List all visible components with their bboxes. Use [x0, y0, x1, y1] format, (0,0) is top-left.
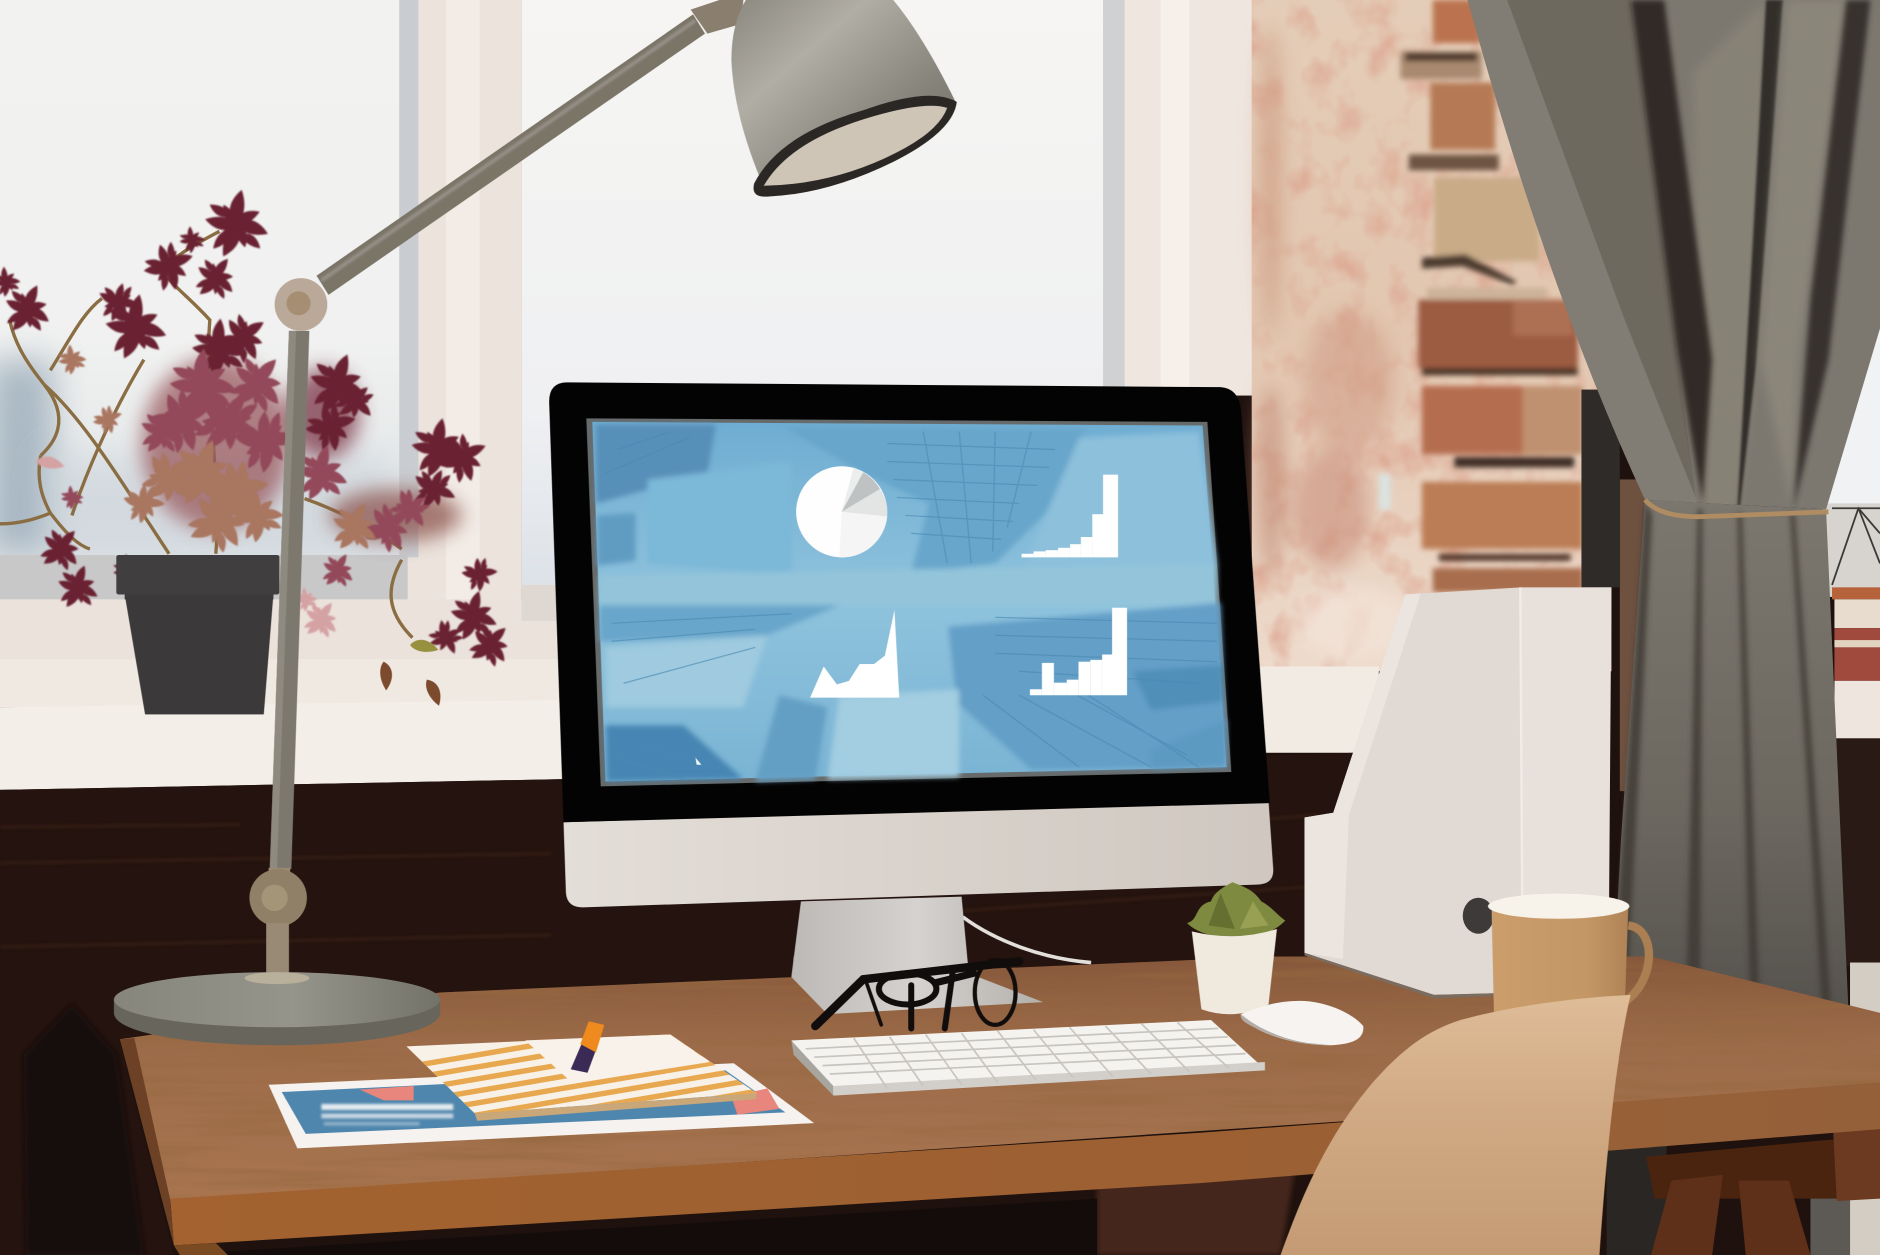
foliage: soft mass behind the leaves [141, 357, 462, 542]
foliage: dark burgundy upper leaves [0, 181, 522, 676]
drainpipe behind the curtain [1581, 390, 1620, 587]
bar chart: bottom right [1030, 608, 1127, 695]
screen wallpaper: buildings [596, 424, 1227, 782]
window frame [0, 0, 1259, 707]
monitor [549, 382, 1273, 1014]
lamp joint upper [691, 0, 743, 34]
mouse [1241, 1001, 1363, 1045]
pie chart [796, 466, 887, 557]
foliage: pink centre leaves [61, 342, 438, 596]
far right window bit with basket and books [1822, 312, 1880, 1255]
area chart [810, 610, 899, 698]
foliage: withered leaves [379, 638, 446, 708]
flowerpot [116, 555, 279, 714]
chair [1281, 995, 1631, 1255]
monitor stand [791, 897, 1043, 1014]
cable [963, 917, 1091, 963]
magazine holders [1304, 587, 1611, 998]
lamp base [114, 1000, 440, 1045]
small succulent in white pot [1187, 882, 1285, 1014]
monitor bezel [549, 382, 1270, 822]
radiator [24, 1004, 144, 1255]
curtain below desk [1607, 1139, 1667, 1255]
curtain tie [1645, 500, 1828, 517]
curtain lower drape [1611, 500, 1849, 1019]
lamp [114, 0, 957, 1045]
lamp joint lower [269, 868, 290, 880]
bar chart: top right [1022, 475, 1118, 557]
desk [120, 957, 1880, 1255]
keyboard [791, 1020, 1265, 1096]
window sill [0, 666, 1379, 790]
dark wall under sill [0, 753, 1379, 1255]
curtain upper drape [1468, 0, 1880, 515]
lamp joint middle [275, 278, 327, 331]
lamp arm [317, 14, 705, 295]
plant stems [0, 231, 412, 638]
brochure under notebook [269, 1063, 814, 1148]
foliage: pale pink leaves [35, 454, 348, 647]
lamp pole [270, 331, 309, 869]
foliage: tan lower leaves [58, 344, 389, 566]
striped notebook [406, 1006, 767, 1187]
mug [1488, 894, 1649, 1013]
highlighter pen [571, 1021, 604, 1073]
glasses [815, 960, 1019, 1028]
plant: flowerpot with foliage [0, 181, 522, 714]
brick wall [1252, 0, 1646, 791]
screen [586, 418, 1231, 786]
monitor chin [564, 801, 1273, 907]
lamp shade [731, 0, 957, 197]
curtain [1468, 0, 1880, 1255]
trestle legs [1646, 1128, 1880, 1255]
cursor [695, 758, 701, 765]
